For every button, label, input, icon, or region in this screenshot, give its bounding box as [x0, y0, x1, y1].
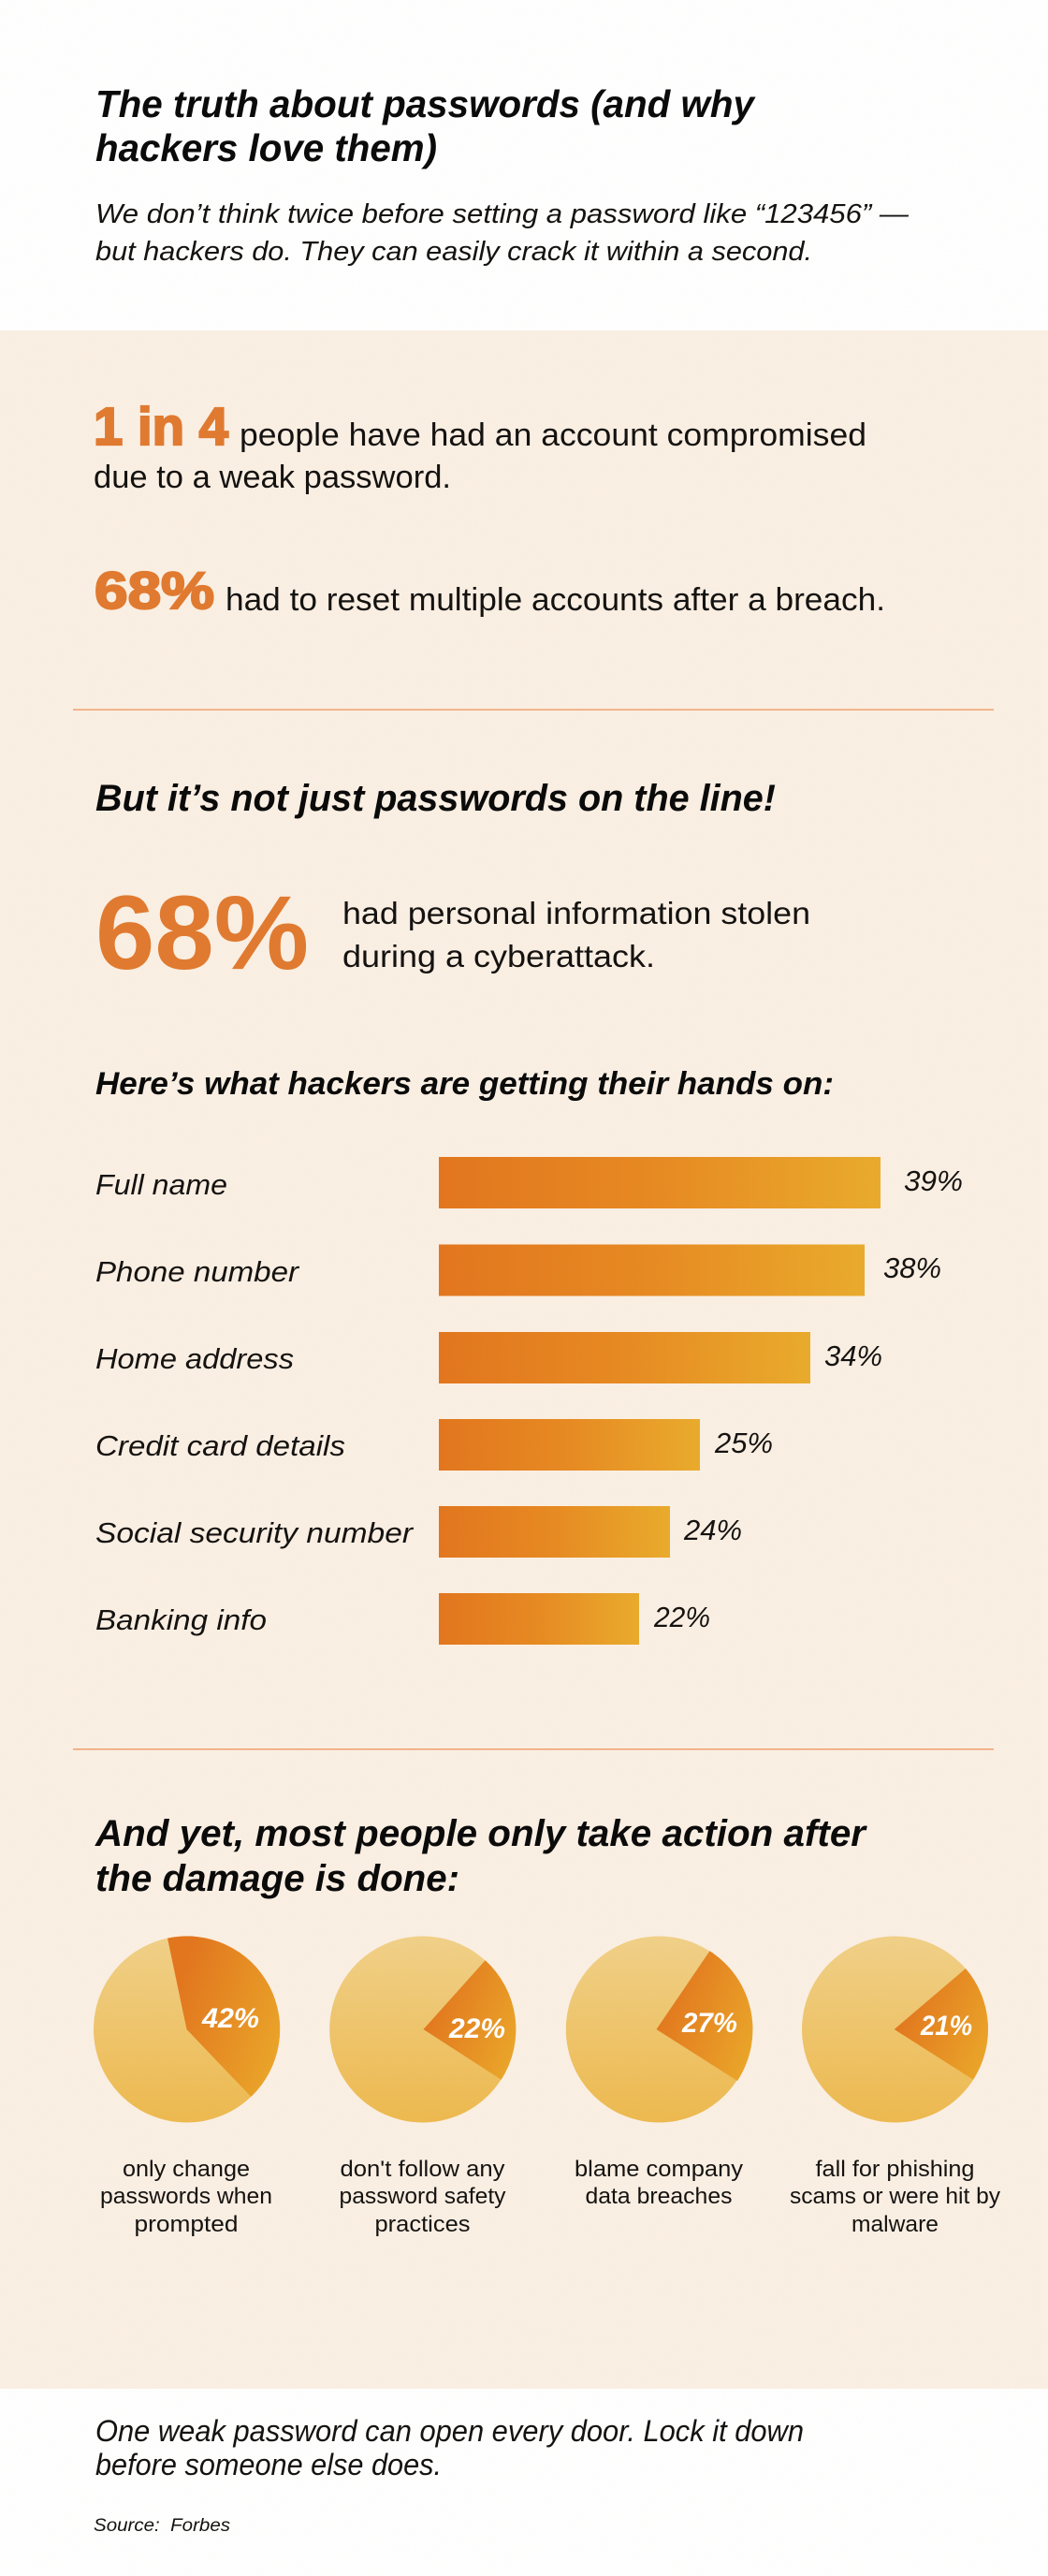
pie: 22% [329, 1936, 516, 2123]
stat: 68% personal information: 68% [95, 874, 309, 991]
closing statement: before someone else does. [95, 2448, 442, 2481]
header block [95, 82, 910, 267]
caption: only change passwords [100, 2157, 272, 2237]
pie: 42%: 42% [201, 2003, 259, 2034]
stat: 68% reset accounts: had to reset multiple accounts after a breach. [226, 582, 885, 618]
pie: 42% [94, 1936, 280, 2123]
caption: phishing or malware: malware [852, 2212, 939, 2237]
caption: phishing or malware [790, 2157, 1000, 2237]
bar row: credit card details: Credit card details [95, 1429, 345, 1462]
bar row: banking info [95, 1593, 710, 1645]
stat: 68% personal information: during a cyberattack. [342, 939, 655, 973]
caption: only change passwords: prompted [135, 2212, 238, 2237]
pie charts [94, 1936, 1000, 2237]
bar row: phone number [95, 1245, 941, 1295]
title [95, 82, 756, 169]
stat: 1 in 4: due to a weak password. [94, 460, 451, 495]
bar row: full name [95, 1157, 963, 1208]
pie: 27%: 27% [681, 2008, 737, 2039]
closing statement [95, 2414, 804, 2481]
caption: don't follow safety practices: don't follow any [341, 2157, 505, 2182]
heading: take action after damage: And yet, most people only take action after [95, 1813, 867, 1854]
bar row: banking info: 22% [653, 1601, 710, 1633]
heading: not just passwords: But it’s not just passwords on the line! [95, 778, 776, 819]
caption: blame company data breaches: data breaches [586, 2184, 732, 2209]
intro text: but hackers do. They can easily crack it within a second. [95, 237, 812, 267]
caption: only change passwords: passwords when [100, 2184, 272, 2209]
bar row: social security number: 24% [683, 1514, 742, 1546]
source note: Source: Forbes [94, 2516, 231, 2536]
pie: 21%: 21% [920, 2011, 972, 2042]
closing statement: One weak password can open every door. Lock it down [95, 2414, 804, 2448]
bar row: phone number: 38% [883, 1251, 941, 1284]
stat: 1 in 4: people have had an account compromised [240, 417, 866, 453]
stat: 1 in 4: 1 in 4 [94, 397, 228, 457]
caption: phishing or malware: fall for phishing [816, 2157, 975, 2182]
bar row: banking info: Banking info [95, 1603, 267, 1636]
intro text [95, 199, 910, 267]
panel: peach main section [0, 330, 1048, 2389]
bar row: home address: 34% [824, 1339, 882, 1372]
bar row: phone number: Phone number [95, 1255, 300, 1288]
pie: 21% [802, 1936, 988, 2123]
bar row: credit card details [95, 1419, 773, 1471]
heading: take action after damage: the damage is done: [95, 1858, 459, 1899]
caption: blame company data breaches [575, 2157, 743, 2209]
pie: 22%: 22% [448, 2013, 505, 2044]
title: hackers love them) [95, 126, 437, 169]
caption: only change passwords: only change [123, 2157, 250, 2182]
caption: don't follow safety practices: password safety [339, 2184, 505, 2209]
title: The truth about passwords (and why [95, 82, 756, 125]
bar row: social security number: Social security number [95, 1516, 415, 1549]
pie: 27% [566, 1936, 752, 2123]
caption: blame company data breaches: blame company [575, 2157, 743, 2182]
heading: bar chart: Here’s what hackers are getting their hands on: [95, 1066, 834, 1102]
caption: phishing or malware: scams or were hit by [790, 2184, 1000, 2209]
stat: 68% reset accounts [95, 561, 885, 620]
bar row: home address: Home address [95, 1342, 294, 1375]
stat: 1 in 4 [94, 397, 866, 495]
caption: don't follow safety practices: practices [374, 2212, 470, 2237]
bar row: social security number [95, 1506, 742, 1558]
bar chart [95, 1157, 963, 1645]
stat: 68% personal information: had personal information stolen [342, 896, 810, 930]
stat: 68% reset accounts: 68% [95, 561, 214, 620]
heading: take action after damage [95, 1813, 867, 1899]
bar row: full name: Full name [95, 1168, 227, 1201]
bar row: full name: 39% [904, 1164, 963, 1197]
caption: don't follow safety practices [339, 2157, 505, 2237]
bar row: credit card details: 25% [714, 1427, 773, 1459]
bar row: home address [95, 1332, 882, 1383]
intro text: We don’t think twice before setting a password like “123456” — [95, 199, 910, 229]
stat: 68% personal information [95, 874, 810, 991]
